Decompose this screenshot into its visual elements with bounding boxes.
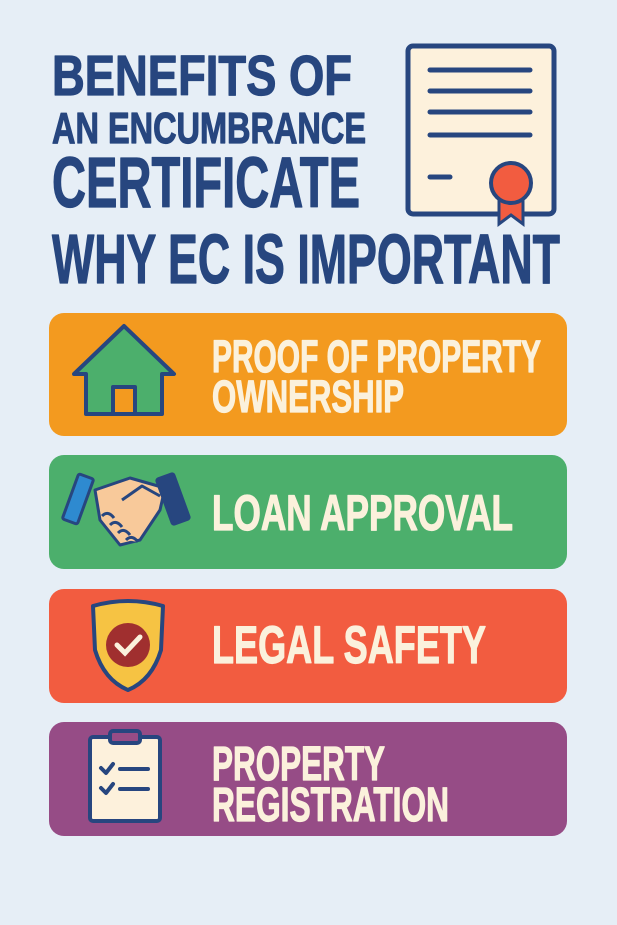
label: REGISTRATION <box>212 779 449 832</box>
title: AN ENCUMBRANCE <box>52 104 366 153</box>
label <box>212 331 541 422</box>
title <box>52 44 366 223</box>
icon: clipboard <box>90 731 160 821</box>
label: PROPERTY <box>212 738 385 791</box>
panel: loan approval <box>49 455 567 569</box>
icon: house <box>74 326 174 414</box>
icon: shield <box>93 601 163 690</box>
title: CERTIFICATE <box>52 144 360 223</box>
panel: property registration <box>49 722 567 836</box>
label: LEGAL SAFETY <box>212 616 486 675</box>
panel: proof of property ownership <box>49 313 567 436</box>
title: BENEFITS OF <box>52 44 352 108</box>
panel: legal safety <box>49 589 567 703</box>
label: OWNERSHIP <box>212 371 404 422</box>
label <box>212 738 449 832</box>
icon: handshake <box>62 473 190 545</box>
icon: certificate <box>408 46 554 224</box>
